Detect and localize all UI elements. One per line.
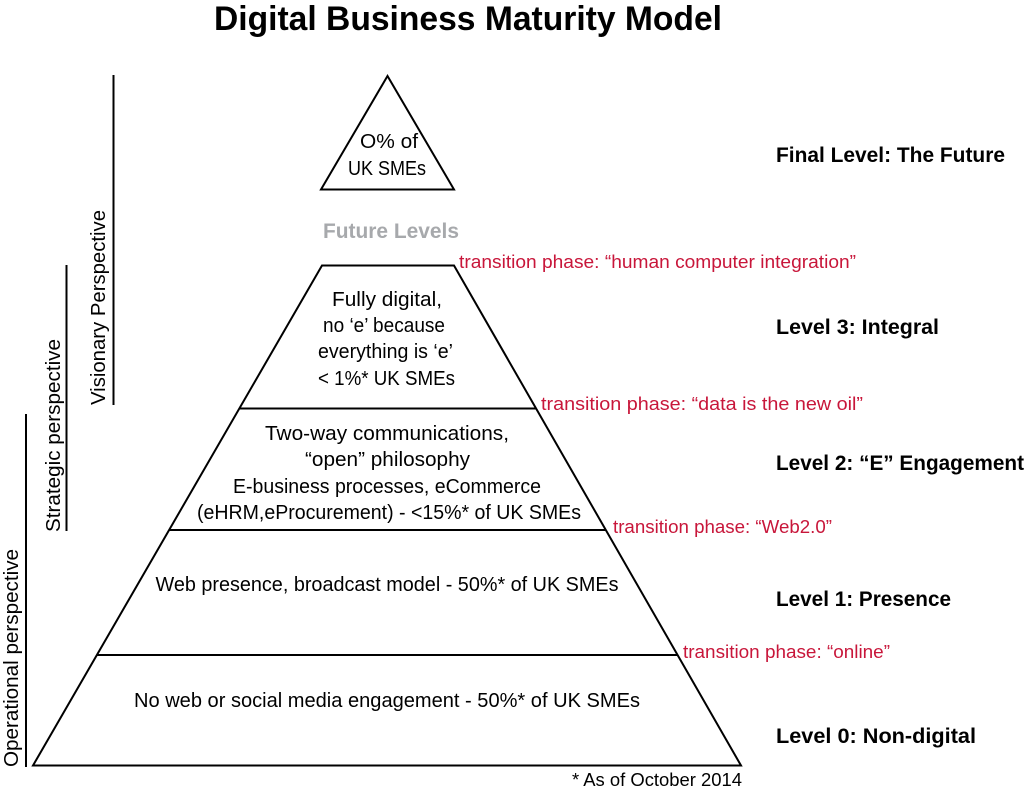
level 0 text: No web or social media engagement - 50%* of UK SMEs — [134, 690, 640, 712]
level 3 text: no ‘e’ because — [323, 315, 445, 337]
transition phase labels: transition phase: “data is the new oil” — [541, 394, 863, 414]
top triangle: final level: UK SMEs — [348, 158, 426, 180]
footnote: * As of October 2014 — [572, 770, 742, 790]
visionary perspective axis: Visionary Perspective — [88, 210, 110, 405]
top triangle: final level: O% of — [360, 131, 418, 153]
level 2 text: E-business processes, eCommerce — [233, 476, 541, 498]
level 3 text: Fully digital, — [332, 289, 442, 311]
future levels label: Future Levels — [323, 220, 459, 243]
level names: Level 0: Non-digital — [776, 725, 976, 748]
main pyramid — [33, 266, 741, 766]
level names: Final Level: The Future — [776, 144, 1005, 167]
level names: Level 2: “E” Engagement — [776, 452, 1024, 475]
level 1 text: Web presence, broadcast model - 50%* of UK SMEs — [156, 574, 618, 596]
level 3 text — [318, 289, 455, 390]
transition phase labels: transition phase: “Web2.0” — [613, 517, 832, 537]
transition phase labels: transition phase: “online” — [683, 642, 890, 662]
level names: Level 3: Integral — [776, 316, 939, 339]
level 2 text: Two-way communications, — [265, 423, 509, 445]
transition phase labels: transition phase: “human computer integration” — [459, 252, 856, 272]
top triangle: final level — [321, 76, 454, 190]
level 2 text — [197, 423, 581, 524]
level names — [776, 144, 1024, 748]
level 2 text: “open” philosophy — [305, 449, 470, 471]
strategic perspective axis: Strategic perspective — [43, 339, 65, 532]
transition phase labels — [459, 252, 890, 662]
level 3 text: < 1%* UK SMEs — [318, 368, 455, 390]
operational perspective axis: Operational perspective — [1, 549, 23, 767]
level 3 text: everything is ‘e’ — [318, 341, 453, 363]
level names: Level 1: Presence — [776, 588, 951, 611]
title: Digital Business Maturity Model — [214, 0, 722, 38]
level 2 text: (eHRM,eProcurement) - <15%* of UK SMEs — [197, 502, 581, 524]
